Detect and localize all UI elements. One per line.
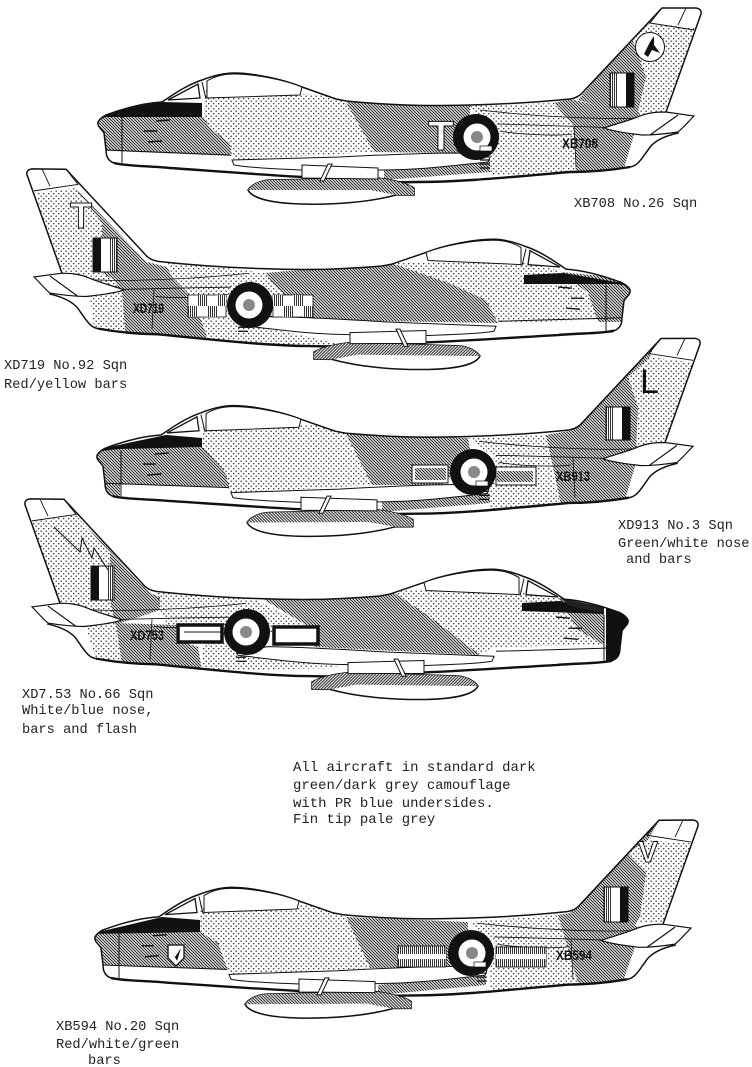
- aircraft: XD753 No.66 Sqn: [25, 499, 640, 702]
- airframe outline and details: [25, 499, 628, 702]
- fin flash: [93, 238, 117, 272]
- squadron bars: [178, 625, 318, 644]
- aircraft: XB708 No.26 Sqn: [90, 2, 710, 204]
- fin flash: [606, 407, 630, 440]
- squadron bars: [412, 465, 536, 485]
- caption: XB708: XB708 No.26 Sqn: [574, 197, 697, 212]
- airframe outline and details: [98, 8, 701, 204]
- checkered squadron bars: [188, 295, 313, 317]
- caption: XB594: Red/white/green: [56, 1038, 179, 1053]
- caption: XB594: [56, 1020, 179, 1067]
- note: camouflage description: Fin tip pale grey: [293, 812, 435, 828]
- roundel: [224, 609, 270, 655]
- caption: XD913: XD913 No.3 Sqn: [618, 519, 733, 534]
- caption: XD753: [22, 688, 153, 738]
- roundel: [450, 449, 496, 495]
- airframe outline and details: [95, 820, 698, 1019]
- caption: XD753: bars and flash: [22, 723, 137, 738]
- note: camouflage description: All aircraft in standard dark: [293, 760, 536, 776]
- code letter L: L: [640, 363, 659, 401]
- serial: XB708: [562, 135, 598, 151]
- serial: XD753: [130, 627, 164, 643]
- caption: XD719: Red/yellow bars: [4, 378, 127, 393]
- camouflage pattern: [32, 515, 640, 670]
- serial: XB594: [556, 947, 592, 963]
- code letter V: V: [638, 836, 658, 869]
- caption: XD719: XD719 No.92 Sqn: [4, 359, 127, 374]
- lightning flash on fin: [54, 527, 108, 570]
- serial: XB913: [556, 468, 590, 484]
- aircraft: XD913 No.3 Sqn: [90, 330, 710, 537]
- aircraft: XB594 No.20 Sqn: [85, 810, 710, 1019]
- caption: XD719: [4, 359, 127, 393]
- fin flash: [610, 73, 634, 107]
- roundel: [453, 114, 499, 160]
- caption: XD753: White/blue nose,: [22, 704, 153, 719]
- caption: XD913: Green/white nose: [618, 537, 749, 552]
- serial: XD719: [133, 300, 164, 316]
- nose badge: [168, 945, 184, 966]
- note: camouflage description: [293, 760, 536, 828]
- camouflage pattern: [98, 20, 694, 180]
- aircraft: XD719 No.92 Sqn: [27, 169, 640, 372]
- note: camouflage description: green/dark grey camouflage: [293, 778, 510, 794]
- code letter T: T: [70, 195, 92, 236]
- roundel: [448, 930, 494, 976]
- airframe outline and details: [27, 169, 630, 372]
- caption: XB594: XB594 No.20 Sqn: [56, 1020, 179, 1035]
- fin flash: [91, 566, 114, 600]
- note: camouflage description: with PR blue undersides.: [293, 796, 494, 812]
- caption: XD913: and bars: [626, 553, 692, 568]
- caption: XD913: [618, 519, 749, 568]
- caption: XD753: XD7.53 No.66 Sqn: [22, 688, 153, 703]
- roundel: [227, 282, 273, 328]
- fin flash: [604, 887, 628, 922]
- squadron bars: [398, 946, 546, 967]
- fin badge: [636, 32, 664, 62]
- camouflage pattern: [37, 188, 640, 345]
- camouflage pattern: [98, 348, 692, 512]
- code letter T: T: [428, 112, 454, 159]
- camouflage pattern: [96, 822, 690, 994]
- airframe outline and details: [97, 338, 700, 537]
